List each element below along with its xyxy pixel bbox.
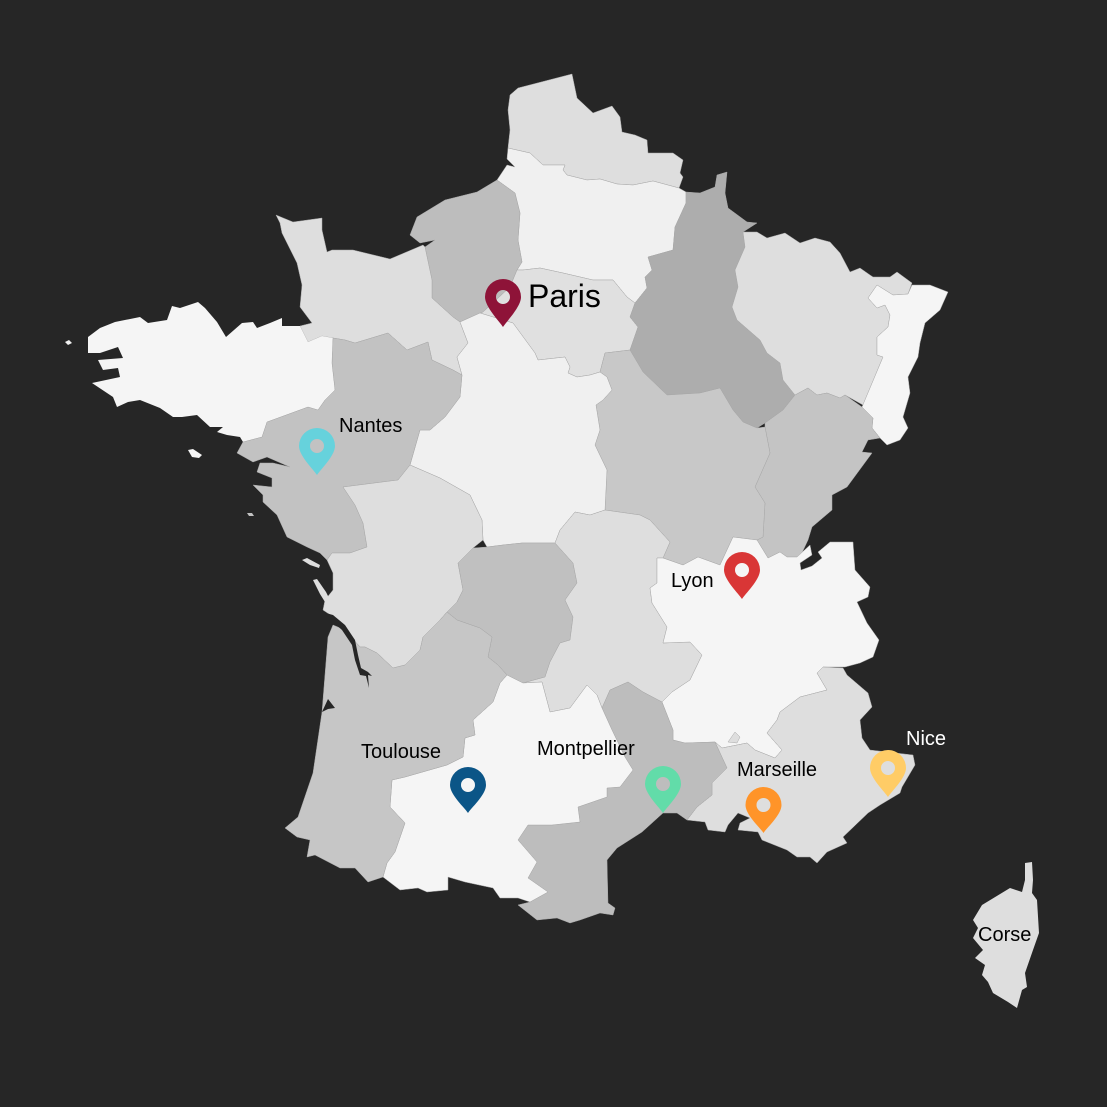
region: Rhône-Alpes bbox=[650, 537, 879, 758]
pin: Nantes bbox=[299, 428, 335, 475]
label: Paris: Paris bbox=[528, 278, 601, 314]
label: Marseille: Marseille bbox=[737, 759, 817, 781]
label: Nice: Nice bbox=[906, 728, 946, 750]
region: Auvergne bbox=[523, 510, 702, 712]
region: Nord-Pas-de-Calais bbox=[508, 74, 683, 188]
region: Champagne-Ardenne bbox=[630, 172, 795, 428]
region: Aquitaine bbox=[285, 612, 507, 882]
region: Poitou-Charentes bbox=[323, 465, 483, 668]
region: Basse-Normandie bbox=[276, 215, 468, 375]
region: Centre bbox=[410, 313, 612, 547]
region: Haute-Normandie bbox=[410, 180, 522, 322]
label: Nantes: Nantes bbox=[339, 415, 402, 437]
islands: Atlantic coast bbox=[65, 340, 330, 602]
island: Corse bbox=[973, 862, 1039, 1008]
region: Bourgogne bbox=[595, 350, 770, 565]
region: Picardie bbox=[497, 148, 686, 303]
region: Alsace bbox=[862, 285, 948, 445]
label: Lyon: Lyon bbox=[671, 570, 714, 592]
region: Franche-Comté bbox=[755, 388, 880, 558]
bay: Arcachon bbox=[322, 699, 335, 712]
region: Pays de la Loire bbox=[237, 333, 462, 560]
estuary: Gironde bbox=[322, 612, 372, 688]
pin: Paris bbox=[485, 279, 521, 327]
pin: Marseille bbox=[746, 787, 782, 833]
enclave: Vaucluse bbox=[728, 732, 740, 743]
region: Midi-Pyrénées bbox=[383, 675, 633, 902]
label: Corse: Corse bbox=[978, 924, 1031, 946]
region: Bretagne bbox=[88, 302, 335, 442]
pin: Montpellier bbox=[645, 766, 681, 813]
region: Provence-Alpes-Côte d'Azur bbox=[687, 667, 915, 863]
pin: Nice bbox=[870, 750, 906, 797]
pin: Toulouse bbox=[450, 767, 486, 813]
region: Languedoc-Roussillon bbox=[518, 682, 727, 923]
region: Limousin bbox=[447, 543, 577, 683]
label: Montpellier: Montpellier bbox=[537, 738, 635, 760]
label: Toulouse: Toulouse bbox=[361, 741, 441, 763]
region: Ile-de-France bbox=[460, 268, 638, 377]
region: Lorraine bbox=[732, 232, 912, 405]
pin: Lyon bbox=[724, 552, 760, 599]
